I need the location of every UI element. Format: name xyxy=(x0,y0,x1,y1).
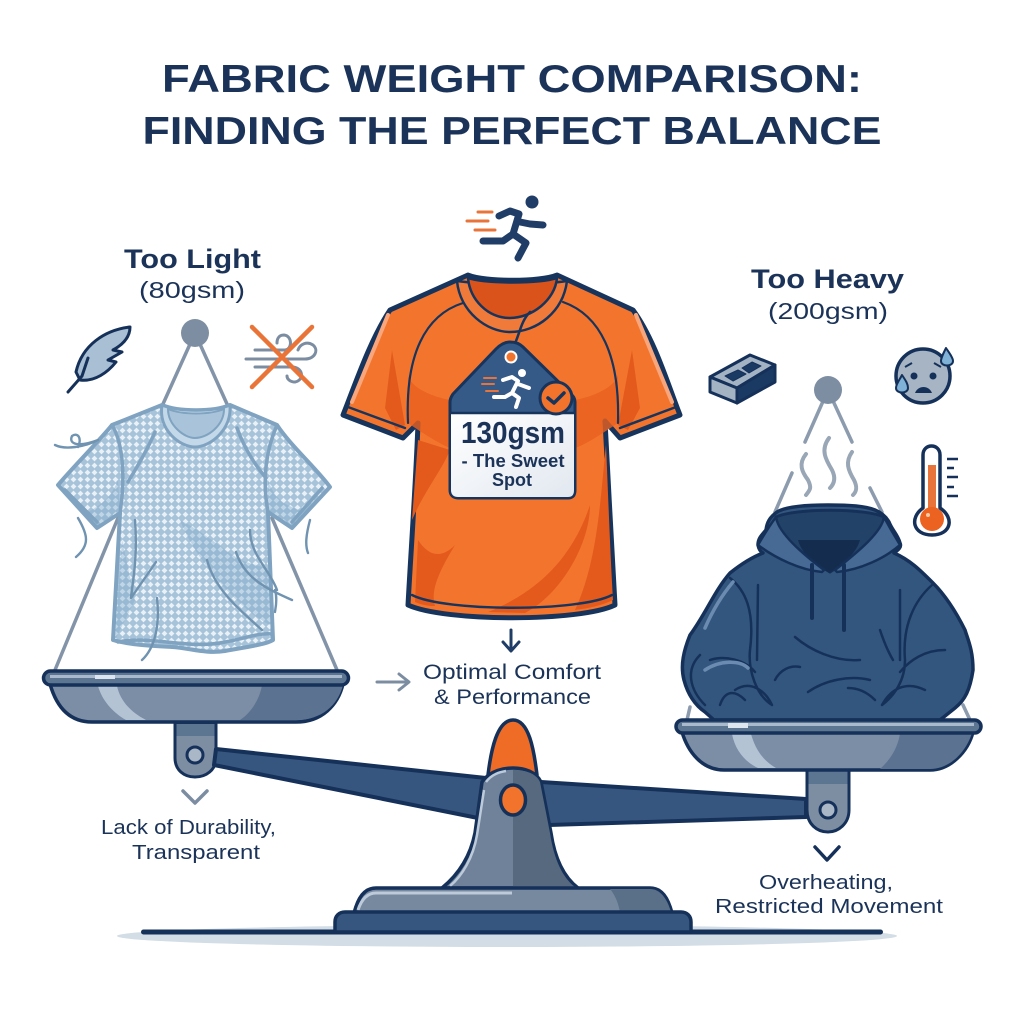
scale base xyxy=(117,888,897,947)
panel: too heavy label: (200gsm) xyxy=(768,298,888,324)
panel: too light label: (80gsm) xyxy=(139,277,245,303)
light shirt suspension cords xyxy=(55,333,337,670)
tag runner icon xyxy=(482,369,529,407)
illustration: navy hoodie xyxy=(682,505,973,720)
left consequence text: Transparent xyxy=(132,841,260,864)
left scale pan xyxy=(44,671,348,722)
optimal comfort arrows xyxy=(377,630,519,690)
optimal comfort text: & Performance xyxy=(434,686,591,709)
left consequence chevron xyxy=(183,791,207,803)
icon: heat steam xyxy=(802,438,856,495)
right scale pan xyxy=(676,720,981,770)
panel: too light label: Too Light xyxy=(124,244,261,274)
tag text: 130gsm xyxy=(461,415,565,450)
icon: crossed-out wind xyxy=(246,327,316,387)
right pan hanger xyxy=(807,770,849,832)
right consequence chevron xyxy=(815,847,839,860)
tag text: Spot xyxy=(492,470,532,490)
optimal comfort text: Optimal Comfort xyxy=(423,661,601,684)
icon: thermometer xyxy=(915,446,958,535)
illustration: light mesh t-shirt xyxy=(55,405,330,660)
icon: brick xyxy=(710,355,775,403)
panel: too light label xyxy=(124,244,261,303)
title: FABRIC WEIGHT COMPARISON: xyxy=(162,58,862,101)
panel: too heavy label: Too Heavy xyxy=(751,264,904,294)
tag text xyxy=(461,415,565,490)
right consequence text: Overheating, xyxy=(759,871,893,894)
tag check badge xyxy=(540,382,572,414)
right consequence text xyxy=(715,871,943,918)
left consequence text xyxy=(101,816,276,864)
panel: too heavy label xyxy=(751,264,904,324)
fulcrum column xyxy=(442,768,578,888)
heavy side suspension cords xyxy=(687,390,970,720)
optimal comfort text xyxy=(423,661,601,709)
left consequence text: Lack of Durability, xyxy=(101,816,276,839)
right consequence text: Restricted Movement xyxy=(715,895,943,918)
title: FINDING THE PERFECT BALANCE xyxy=(142,110,882,153)
sweet spot tag xyxy=(450,342,575,498)
icon: running figure xyxy=(467,196,543,258)
orange fulcrum cap xyxy=(488,720,537,775)
tag text: - The Sweet xyxy=(462,451,564,471)
title xyxy=(142,58,882,153)
icon: left hanger ball xyxy=(181,319,209,347)
tag eyelet xyxy=(506,352,516,362)
scale beam xyxy=(214,749,806,825)
left pan hanger xyxy=(175,723,216,777)
icon: right hanger ball xyxy=(814,376,842,404)
icon: sweating face xyxy=(896,348,953,403)
icon: feather xyxy=(68,327,130,392)
illustration: orange t-shirt xyxy=(343,275,680,618)
pivot xyxy=(500,785,526,815)
